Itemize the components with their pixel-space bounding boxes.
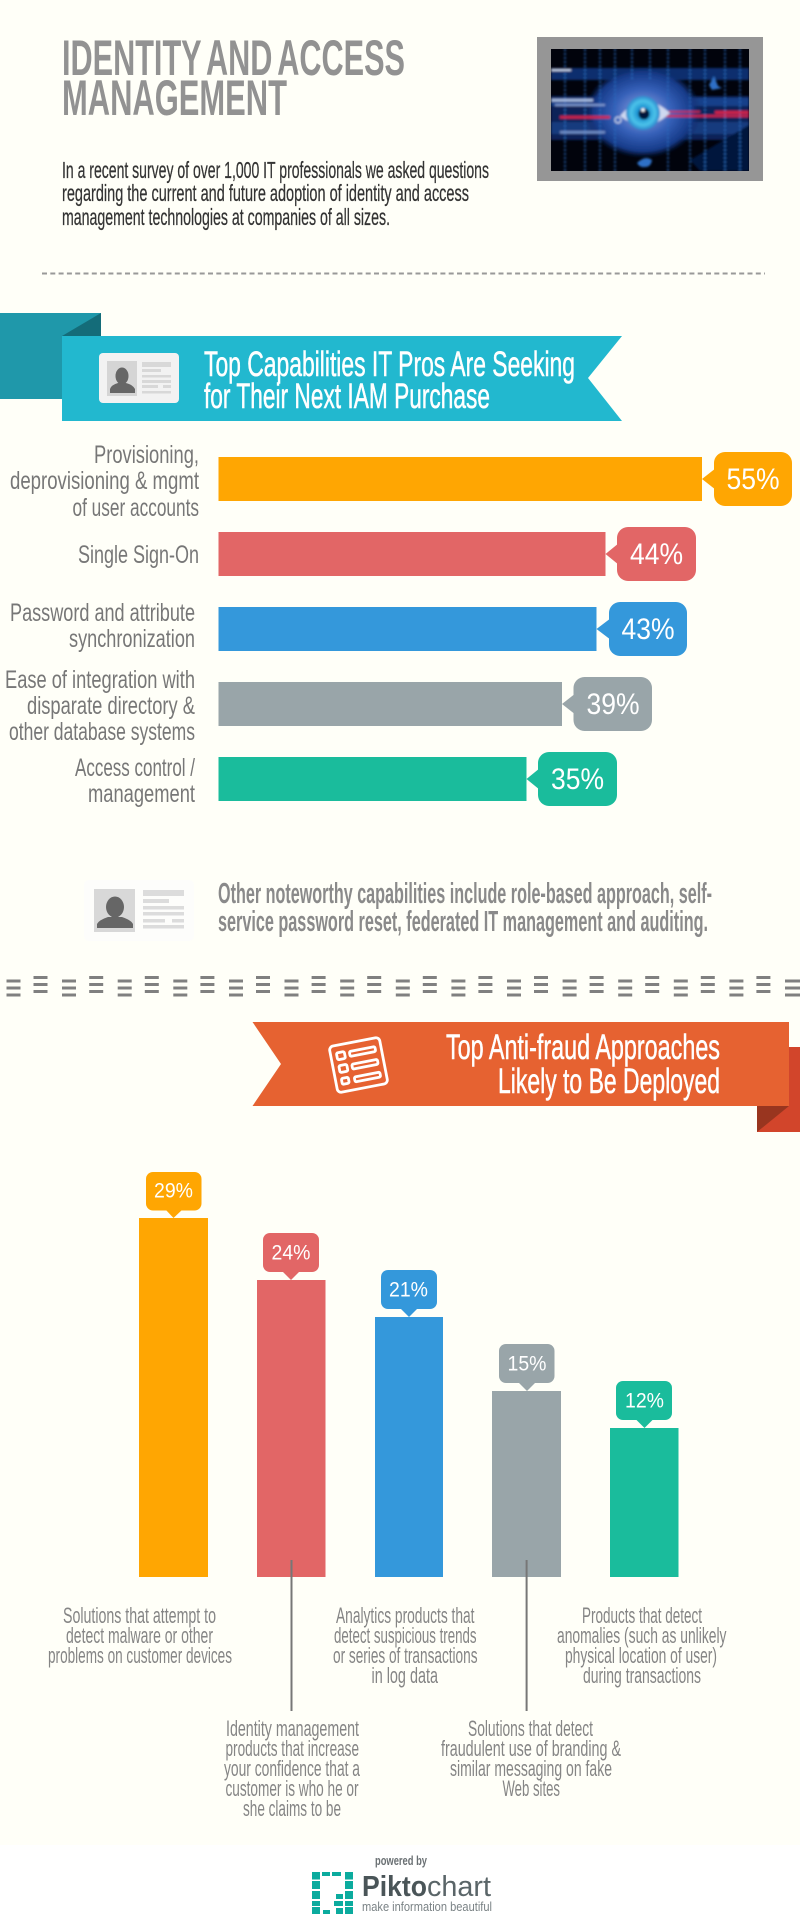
row: provisioning 55% [10,441,792,522]
caption: malware solutions: detect malware or other [66,1623,213,1648]
caption: analytics products: Analytics products that [336,1603,474,1628]
row: password sync 43%: 43% [622,613,674,646]
note: other noteworthy capabilities [84,878,712,941]
caption: fraudulent branding [441,1716,621,1801]
row: password sync 43%: synchronization [69,625,195,653]
caption: anomaly detection: during transactions [583,1663,701,1688]
caption: identity management: Identity management [226,1716,359,1741]
column: 29% [139,1172,208,1577]
row: ease of integration 39%: Ease of integration with [5,666,195,694]
icon: ID card [99,353,179,403]
dashed divider [42,272,765,274]
icon: faint ID card [84,880,194,941]
caption: fraudulent branding: similar messaging on fake [450,1756,612,1781]
row: single sign-on 44%: 44% [630,538,683,571]
footer: Piktochart logo: chart [427,1871,491,1903]
bar chart: top capabilities [5,441,792,808]
intro text block: regarding the current and future adoption of identity and access [62,180,469,206]
row: provisioning 55%: of user accounts [72,494,199,522]
caption: analytics products: detect suspicious trends [334,1623,476,1648]
footer: Piktochart logo: make information beautiful [362,1899,492,1914]
row: access control 35% [75,752,617,808]
row: single sign-on 44%: Single Sign-On [78,541,199,569]
leader line: fraudulent branding [526,1560,528,1711]
row: ease of integration 39%: other database systems [9,718,195,746]
caption: anomaly detection: physical location of user) [565,1643,717,1668]
caption: malware solutions: problems on customer devices [48,1643,232,1668]
title: IDENTITY AND ACCESS [62,30,405,86]
caption: fraudulent branding: fraudulent use of branding & [441,1736,621,1761]
ribbon: top capabilities heading [0,313,622,421]
row: password sync 43%: Password and attribute [10,599,195,627]
title [62,30,405,126]
ribbon: top capabilities heading: Top Capabilities IT Pros Are Seeking [204,345,575,384]
footer: Piktochart logo: Pikto [362,1871,427,1903]
icon: Piktochart mark [312,1872,353,1914]
caption: anomaly detection: Products that detect [582,1603,702,1628]
column: 24% [257,1233,326,1577]
intro text block: In a recent survey of over 1,000 IT professionals we asked questions [62,157,489,183]
column: 12% [610,1381,678,1577]
ribbon: top capabilities heading: for Their Next IAM Purchase [204,377,490,416]
caption: identity management: she claims to be [243,1796,341,1821]
caption: identity management [224,1716,360,1821]
row: provisioning 55%: deprovisioning & mgmt [10,467,199,495]
caption: identity management: your confidence that a [224,1756,360,1781]
caption: analytics products: or series of transactions [333,1643,478,1668]
column: 21%: 21% [389,1278,428,1302]
column: 15%: 15% [508,1352,546,1376]
intro text block [62,157,489,230]
row: single sign-on 44% [78,527,696,581]
column: 21% [375,1270,443,1577]
caption: identity management: products that increase [226,1736,359,1761]
caption: identity management: customer is who he or [226,1776,358,1801]
stripe pattern divider [6,976,800,996]
column chart: anti-fraud approaches [139,1172,678,1577]
icon: checklist [329,1037,388,1093]
column: 12%: 12% [625,1388,664,1412]
caption: analytics products [333,1603,478,1688]
row: password sync 43% [10,599,687,656]
caption: malware solutions [48,1603,232,1668]
footer: Piktochart logo: powered by [375,1854,427,1868]
row: ease of integration 39% [5,666,652,746]
photo: digital eye in grey frame [537,37,763,181]
caption: fraudulent branding: Solutions that detect [468,1716,593,1741]
footer: Piktochart logo [312,1854,492,1914]
column: 24%: 24% [272,1240,310,1264]
column: 15% [492,1344,561,1577]
row: ease of integration 39%: 39% [586,688,640,721]
ribbon: anti-fraud heading [252,1022,800,1132]
intro text block: management technologies at companies of all sizes. [62,204,390,230]
row: ease of integration 39%: disparate directory & [27,692,195,720]
title: MANAGEMENT [62,70,287,126]
row: provisioning 55%: 55% [726,463,780,496]
row: access control 35%: Access control / [75,754,195,782]
leader line: identity management [290,1560,292,1711]
row: provisioning 55%: Provisioning, [94,441,199,469]
caption: analytics products: in log data [372,1663,438,1688]
caption: fraudulent branding: Web sites [502,1776,560,1801]
caption: malware solutions: Solutions that attempt to [63,1603,216,1628]
column: 29%: 29% [154,1178,193,1202]
row: access control 35%: management [88,780,195,808]
caption: anomaly detection [557,1603,726,1688]
row: access control 35%: 35% [551,763,604,796]
